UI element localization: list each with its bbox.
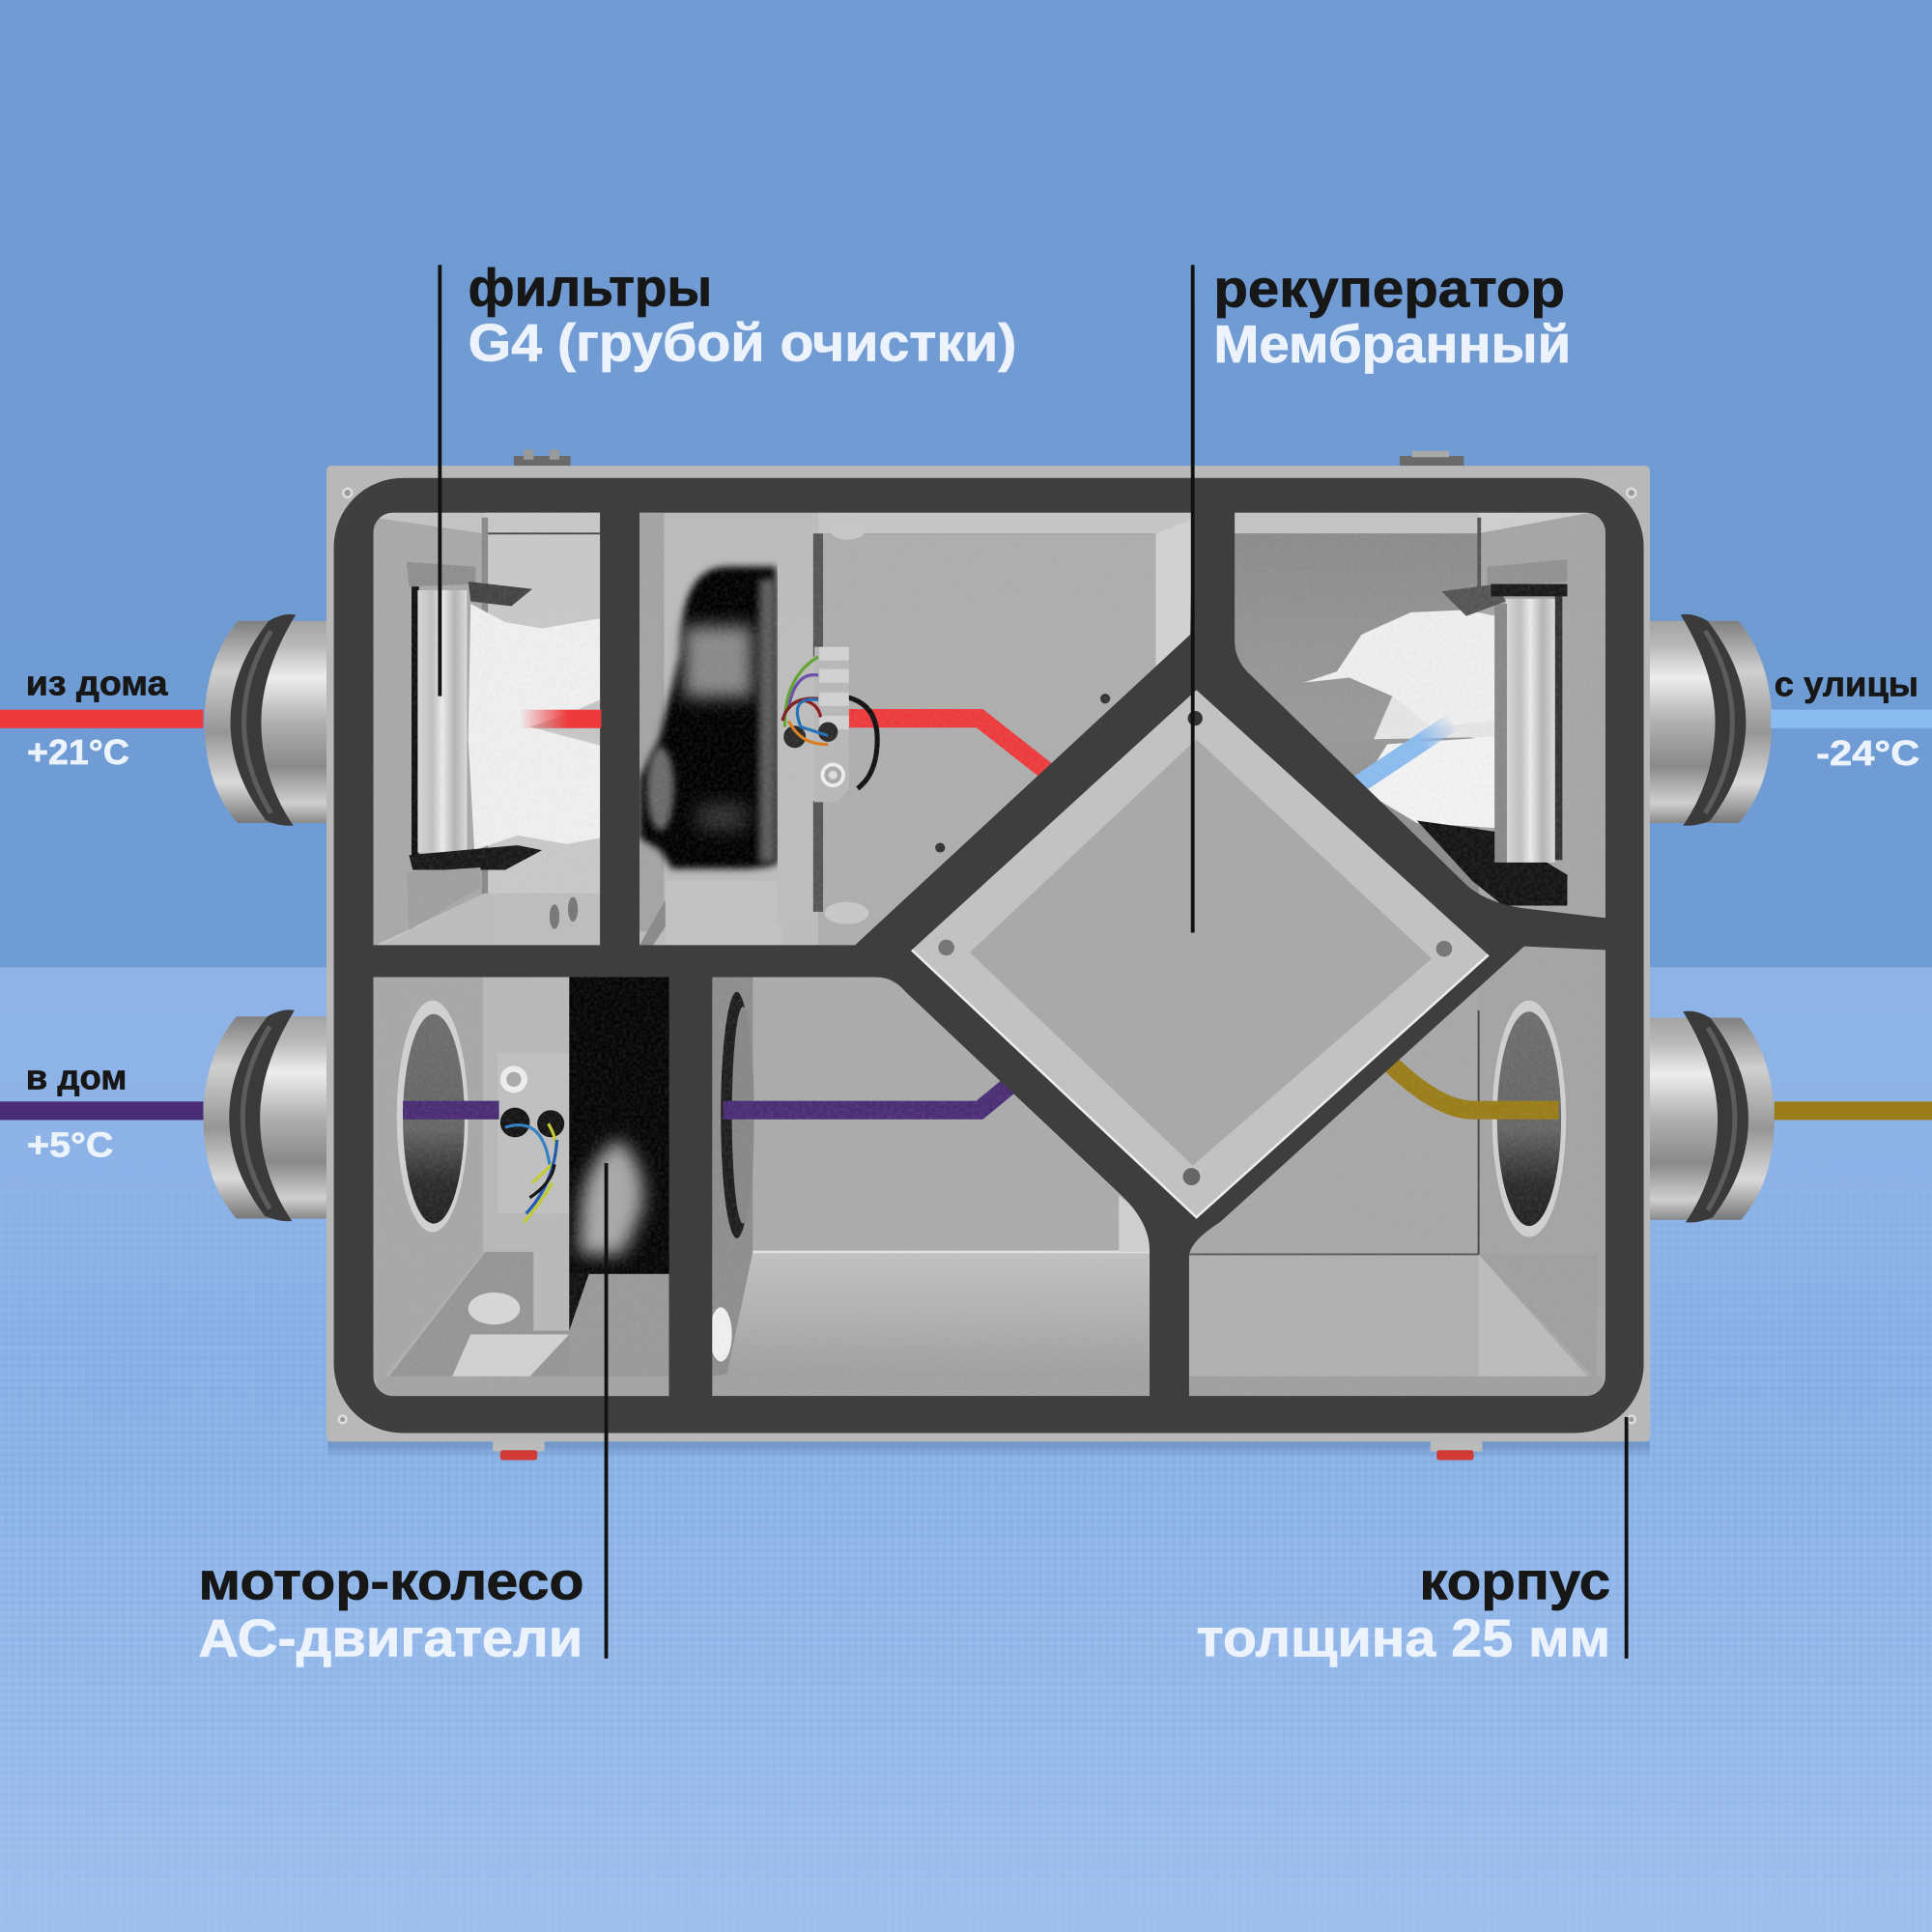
filter frame (1555, 589, 1562, 860)
filter bracket top (407, 562, 532, 607)
side opening (721, 992, 753, 1238)
opening hole (403, 1014, 465, 1224)
airflow: outside intake (1771, 710, 1932, 728)
heading: casing: корпус (1419, 1551, 1610, 1611)
leader line: recuperator (1191, 265, 1194, 933)
label: from outside (1775, 666, 1919, 773)
cable loop (848, 697, 877, 788)
compartment: upper fan (639, 513, 824, 947)
motor post and terminal block (778, 528, 877, 925)
shadow under unit (327, 1441, 1650, 1459)
opening ring (1492, 1001, 1566, 1237)
grommet (469, 1293, 520, 1324)
heading: recuperator: Мембранный (1213, 314, 1571, 374)
label: from outside: -24°C (1816, 734, 1919, 773)
grommets (783, 722, 838, 748)
airflow: extract from house (0, 710, 203, 728)
filter bracket bottom (407, 845, 542, 930)
insulation frame ring (334, 478, 1644, 1433)
leader line: casing (1625, 1417, 1628, 1659)
gold airflow inside unit (1386, 1060, 1559, 1110)
compartment: upper right with filter (1235, 513, 1605, 918)
background: wall (0, 0, 1932, 967)
leader line: filters (439, 265, 441, 696)
airflow: exhaust (1775, 1101, 1932, 1120)
heading: casing: толщина 25 мм (1197, 1607, 1610, 1667)
core silver border (912, 690, 1489, 1217)
filter media (469, 604, 600, 850)
label: from house (26, 664, 169, 772)
red airflow inside unit (844, 719, 1060, 781)
bottom lip (377, 1377, 669, 1400)
heading: filters: фильтры (469, 257, 712, 317)
label plate (452, 1334, 569, 1377)
leader line: motor (605, 1163, 608, 1659)
motor post (533, 977, 571, 1331)
bolt (500, 1065, 527, 1093)
heading: filters (469, 257, 1016, 373)
blue airflow inside unit (1343, 721, 1454, 795)
insulation frame base (334, 478, 1644, 1433)
opening hole (1497, 1011, 1561, 1226)
heading: motor: АС-двигатели (198, 1607, 582, 1667)
label: to house: +5°C (27, 1126, 113, 1165)
compartment: lower left with opening (373, 977, 674, 1400)
heading: recuperator (1213, 259, 1571, 374)
screws (938, 711, 1452, 1185)
filter frame (412, 586, 419, 858)
label: to house (26, 1059, 127, 1165)
duct: right upper (1647, 614, 1772, 826)
mounting clips: top (514, 450, 1463, 466)
airflow: supply to house (0, 1101, 203, 1120)
compartment: lower right with opening (1189, 936, 1605, 1396)
metal grain texture (403, 533, 1567, 1326)
heading: motor (198, 1551, 584, 1667)
label: from house: из дома (26, 664, 169, 702)
purple airflow inside unit (403, 1069, 1029, 1110)
grommet (710, 1307, 732, 1361)
filter dark base (1417, 820, 1567, 906)
heading: recuperator: рекуператор (1213, 259, 1565, 319)
heading: motor: мотор-колесо (198, 1551, 584, 1611)
filter media (1303, 610, 1495, 739)
duct: right lower (1650, 1011, 1775, 1223)
background: fabric floor (0, 967, 1932, 1932)
mounting feet: bottom (493, 1441, 1482, 1460)
recuperator core (912, 690, 1489, 1217)
internal partitions (373, 513, 1605, 1396)
core plate (970, 739, 1432, 1166)
airflow: red fade through filter (520, 710, 601, 728)
heading: filters: G4 (грубой очистки) (469, 313, 1016, 373)
grommets (500, 1108, 564, 1137)
wires (782, 657, 828, 744)
terminal bricks (819, 647, 849, 729)
filter bracket (1441, 559, 1567, 616)
fan wheel (639, 567, 779, 868)
casing screws (339, 489, 1635, 1423)
unit housing (327, 466, 1650, 1441)
heading: casing (1197, 1551, 1610, 1667)
compartment: upper centre (818, 513, 1193, 947)
duct: left lower (203, 1009, 327, 1221)
compartment: lower centre (710, 977, 1151, 1396)
outer casing (327, 466, 1650, 1441)
side flange (712, 977, 753, 1377)
opening ring (397, 1001, 469, 1233)
duct: left upper (205, 614, 329, 826)
label: to house: в дом (26, 1059, 127, 1097)
fan wheel (569, 977, 674, 1331)
bolt (820, 763, 845, 787)
compartment: upper left with filter (373, 513, 600, 947)
label: from outside: с улицы (1775, 666, 1918, 704)
wires (505, 1123, 557, 1222)
label: from house: +21°C (27, 733, 129, 772)
